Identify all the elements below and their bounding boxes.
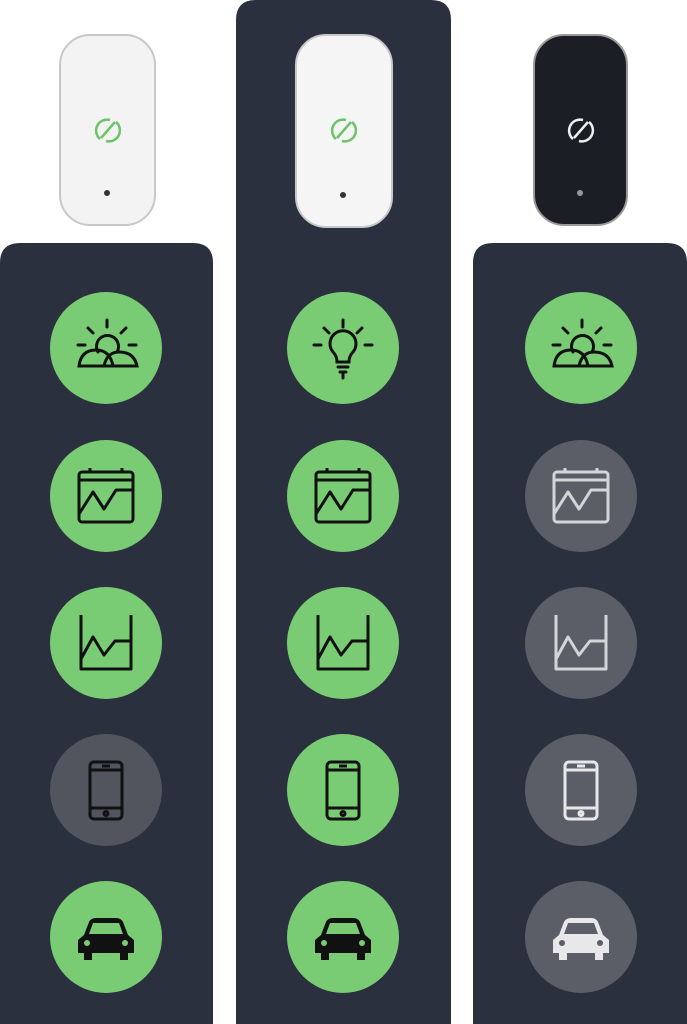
column: left icons [50, 292, 162, 993]
icon: phone [287, 734, 399, 846]
panel: middle [236, 0, 451, 1024]
icon: sun [50, 292, 162, 404]
icon: car [525, 881, 637, 993]
icon: calendar chart [50, 440, 162, 552]
icon: calendar chart [287, 440, 399, 552]
icon: bulb [287, 292, 399, 404]
icon: chart [525, 587, 637, 699]
icon: sun [525, 292, 637, 404]
device: white middle [296, 35, 392, 227]
icon: chart [50, 587, 162, 699]
icon: car [287, 881, 399, 993]
icon: calendar chart [525, 440, 637, 552]
column: right icons [525, 292, 637, 993]
icon: car [50, 881, 162, 993]
panel: right [473, 243, 687, 1024]
icon: phone [50, 734, 162, 846]
device: dark right [534, 35, 627, 225]
icon: chart [287, 587, 399, 699]
column: middle icons [287, 292, 399, 993]
icon: phone [525, 734, 637, 846]
panel: left [0, 243, 213, 1024]
device: white left [60, 35, 155, 225]
